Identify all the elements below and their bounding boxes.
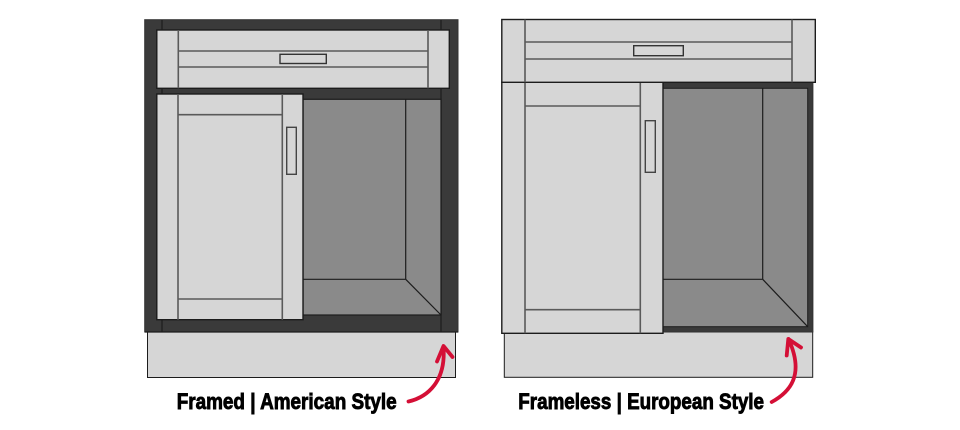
panel: framed American cabinet bbox=[145, 20, 458, 414]
drawer front bbox=[157, 30, 449, 88]
door bbox=[502, 82, 663, 333]
drawer handle bbox=[634, 46, 683, 56]
drawer front bbox=[502, 20, 815, 82]
arrow bbox=[408, 346, 452, 402]
face frame bbox=[145, 20, 458, 332]
panel: frameless European cabinet bbox=[502, 20, 815, 414]
cabinet interior bbox=[663, 88, 808, 327]
label: Framed | American Style bbox=[177, 389, 397, 414]
door handle bbox=[287, 127, 296, 174]
door handle bbox=[645, 121, 655, 172]
door bbox=[157, 94, 303, 320]
drawer handle bbox=[280, 54, 326, 64]
toe kick bbox=[504, 332, 813, 377]
carcass edge bbox=[660, 82, 813, 332]
arrow bbox=[772, 339, 801, 402]
label: Frameless | European Style bbox=[518, 389, 764, 414]
toe kick bbox=[148, 332, 456, 378]
cabinet interior bbox=[303, 99, 441, 315]
